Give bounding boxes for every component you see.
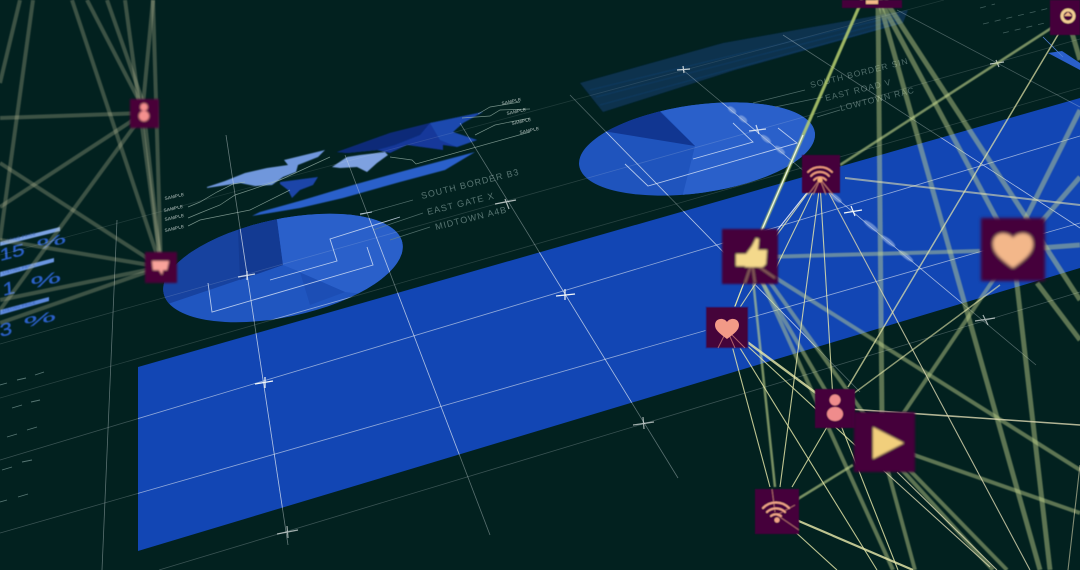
map labels: SAMPLE	[164, 213, 185, 222]
node: left user	[130, 99, 159, 128]
left network cluster	[0, 0, 161, 323]
node: wifi centre	[802, 155, 840, 195]
link: hub to thumb bright	[750, 0, 862, 257]
grid lines lit on blue	[138, 102, 1080, 508]
node: heart small	[706, 307, 748, 348]
location labels left: MIDTOWN A4B	[434, 204, 508, 232]
dashed rows	[0, 372, 44, 502]
location labels left: EAST GATE X	[426, 190, 496, 217]
map labels: SAMPLE	[511, 117, 532, 126]
label bar 3: LISTING PRICE	[2, 300, 36, 313]
map: Africa	[332, 152, 388, 172]
stat 1: 1	[2, 277, 16, 300]
map labels: SAMPLE	[163, 204, 184, 213]
location labels right: EAST ROAD V	[824, 77, 892, 103]
pie overlay outlines	[208, 123, 797, 312]
map: South America	[280, 177, 318, 198]
node: left thumb	[145, 252, 177, 283]
map labels: SAMPLE	[519, 126, 540, 135]
location labels right: SOUTH BORDER SIN	[809, 56, 909, 90]
pie slice: dark	[606, 112, 695, 146]
node: heart large	[981, 218, 1045, 281]
node: thumbs up	[722, 229, 778, 284]
node: top hub	[842, 0, 902, 8]
network links: wide translucent	[750, 0, 1080, 570]
map: North America	[207, 150, 325, 188]
node: play	[854, 412, 915, 472]
stat 3 percent sign: %	[23, 307, 56, 331]
chart: right pie	[579, 102, 815, 196]
pie slice: dark	[163, 219, 277, 304]
pie slice: light	[660, 102, 815, 195]
location labels right	[809, 56, 916, 113]
node: user	[815, 389, 855, 428]
map labels	[163, 97, 540, 233]
map leader lines	[188, 102, 530, 226]
label bar 1: LISTING PRICE	[2, 231, 36, 244]
map labels: SAMPLE	[506, 107, 527, 116]
dashes on diagonal	[727, 105, 915, 264]
map labels: SAMPLE	[164, 224, 185, 233]
world map	[207, 112, 483, 216]
location labels left: SOUTH BORDER B3	[420, 167, 520, 201]
panel: blue perspective strip	[138, 98, 1080, 551]
location labels right: LOWTOWN RAC	[839, 85, 916, 113]
stat 15 percent sign: %	[36, 230, 67, 253]
top right blue fragment	[1043, 37, 1080, 70]
pie slice: darkest	[238, 219, 283, 280]
stat 1 percent sign: %	[30, 267, 62, 292]
panel: hatched data band	[580, 10, 908, 112]
pie slice: light	[277, 214, 403, 294]
map labels: SAMPLE	[501, 97, 522, 106]
node: top right location	[1050, 0, 1080, 35]
map labels: SAMPLE	[164, 192, 185, 201]
location labels left	[420, 167, 520, 232]
node: wifi lower	[755, 489, 799, 534]
network links: thin	[727, 28, 1080, 570]
map: Antarctica	[252, 152, 475, 216]
top right faint data dashes	[980, 4, 1050, 33]
label bar 2: LISTING PRICE	[2, 262, 36, 275]
grid crosses	[238, 60, 1004, 538]
percent stats	[0, 227, 67, 341]
leader lines beside labels	[360, 90, 840, 240]
chart: left pie	[163, 214, 403, 322]
pie slice: shaded bottom	[293, 269, 344, 305]
map: Eurasia	[337, 112, 483, 153]
